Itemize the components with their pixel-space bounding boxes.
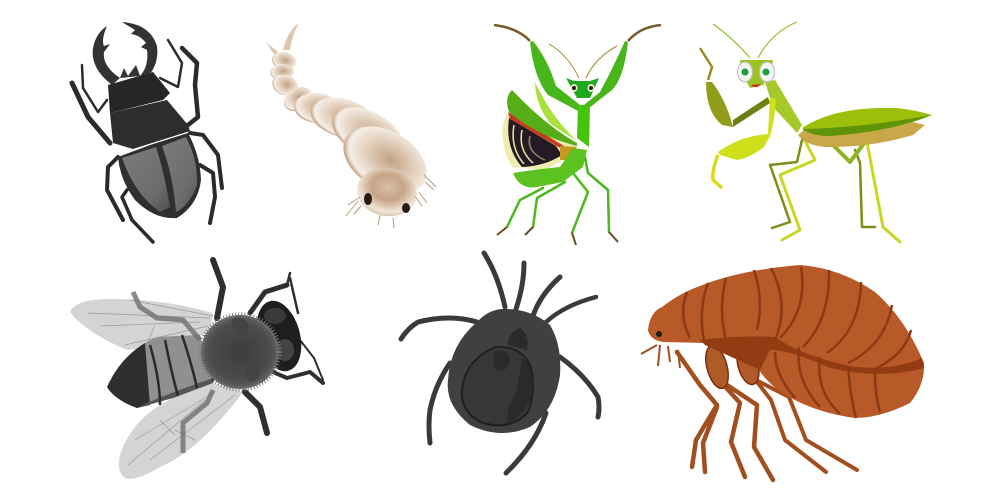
beetle mandibles [93,26,120,85]
fly thorax patches [229,314,262,383]
green mantis legs [507,157,609,233]
beetle wing cases [122,147,170,212]
tick legs [401,253,599,473]
larva body segments [270,49,298,73]
flea segment lines [683,267,911,418]
flea eye [656,331,662,337]
larva head [353,163,421,221]
flea femurs [702,343,763,391]
green mantis feet [497,227,618,245]
beetle legs [72,40,222,242]
insect: olive mantis side view [700,22,932,242]
fly translucent legs over wings [133,292,213,453]
olive mantis light foreleg [718,98,776,160]
beetle abdomen [118,133,201,218]
olive mantis legs [770,137,900,242]
green mantis dark wing [507,90,577,146]
green mantis abdomen [513,148,587,187]
fly abdomen [107,335,213,408]
olive mantis wing [802,108,932,136]
green mantis eyes [570,84,594,92]
beetle thorax [110,100,190,149]
insect: pale larva [266,23,438,228]
tick shield [462,347,533,425]
green mantis head [566,78,599,98]
olive mantis antennae [713,22,797,58]
larva tail [266,23,299,56]
larva bristles [346,175,436,228]
tick back markings [493,328,533,424]
green mantis patterned wing [502,112,577,170]
fly lower wing [119,383,243,479]
olive mantis dark foreleg [733,97,770,127]
flea legs [677,352,857,480]
olive mantis prothorax [765,80,802,133]
insect: green mantis with wings spread [494,25,661,245]
beetle head [108,72,170,113]
flea body [648,265,924,418]
flea dark underside band [700,336,924,374]
olive mantis abdomen [798,120,925,147]
fly upper wing [70,299,213,350]
fly thorax [201,315,279,389]
flea mouthparts [641,345,680,368]
fly legs [213,260,323,433]
olive mantis mouth [751,84,761,87]
olive mantis dark claw [700,48,712,80]
insect: flea [641,265,924,480]
olive mantis eyes [738,62,774,82]
insect: tick [401,253,599,473]
fly head [249,296,309,376]
green mantis thorax [577,105,590,147]
green mantis antennae [549,44,617,78]
green mantis wing rings [513,125,545,164]
insect: stag beetle [72,22,222,242]
olive mantis head [740,60,773,88]
green mantis forelegs [530,41,580,112]
insect: fly [70,260,323,479]
green mantis wing red band [508,112,564,149]
green mantis claws [494,25,661,41]
green mantis light wing [535,82,577,141]
larva eyes [364,193,410,213]
tick body [448,309,560,433]
